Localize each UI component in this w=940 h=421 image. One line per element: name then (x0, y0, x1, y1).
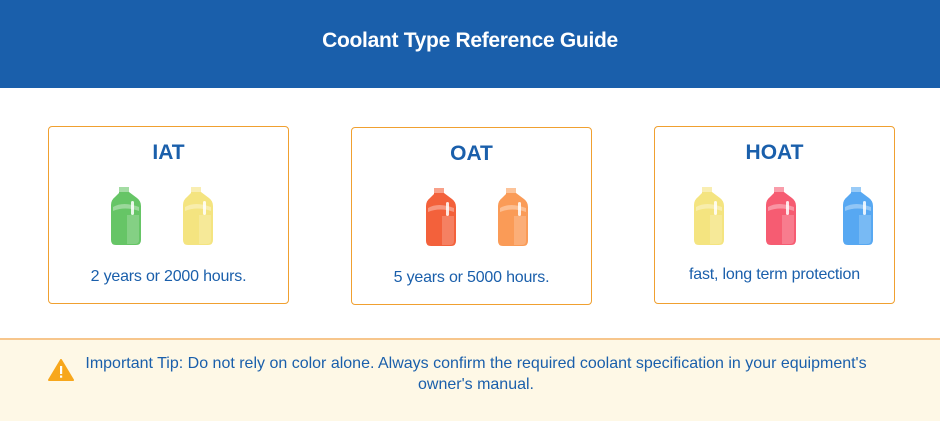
icon: orange jug (498, 188, 528, 246)
heading: HOAT: HOAT (746, 141, 803, 164)
header (0, 0, 940, 88)
header: Coolant Type Reference Guide (322, 29, 618, 52)
icon: red-orange jug (426, 188, 456, 246)
heading: OAT: OAT (450, 142, 493, 165)
heading: IAT: IAT (152, 141, 185, 164)
panel: OAT (351, 127, 592, 305)
panel: HOAT (654, 126, 895, 304)
icon: green jug (111, 187, 141, 245)
text: OAT interval: 5 years or 5000 hours. (394, 269, 549, 286)
icon: pink jug (766, 187, 796, 245)
icon: blue jug (843, 187, 873, 245)
tip panel (0, 338, 940, 421)
icon: warning (48, 359, 74, 381)
text: tip (85, 355, 867, 393)
panel: IAT (48, 126, 289, 304)
text: tip: owner's manual. (418, 376, 534, 393)
text: HOAT benefit: fast, long term protection (689, 266, 860, 283)
text: tip: Important Tip: Do not rely on color alone. Always confirm the required coolant specification in your equipment's (85, 355, 867, 372)
text: IAT interval: 2 years or 2000 hours. (91, 268, 246, 285)
icon: yellow jug (183, 187, 213, 245)
icon: yellow jug (694, 187, 724, 245)
